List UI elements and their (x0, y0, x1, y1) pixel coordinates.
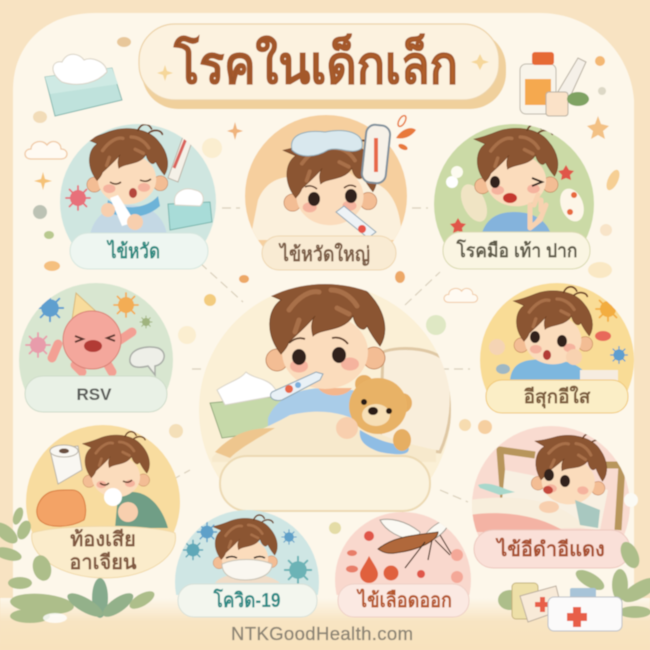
circle background (434, 124, 594, 242)
label: โควิด-19 (213, 588, 280, 612)
illustration: boy with blisters (446, 124, 588, 240)
panel: ท้องเสีย อาเจียน (26, 425, 180, 579)
circle background (60, 124, 216, 242)
label: ท้องเสีย (70, 528, 136, 551)
label pill (178, 584, 317, 617)
decorative confetti (33, 37, 622, 534)
panel: โควิด-19 (174, 510, 320, 618)
panel: RSV (18, 282, 174, 413)
illustration: boy with toilet roll (37, 432, 168, 528)
icon: tissue box top left (45, 54, 122, 116)
circle background (480, 282, 634, 391)
label pill (338, 584, 469, 617)
panel: ไข้หวัดใหญ่ (245, 114, 416, 277)
icon: fever marks (396, 114, 416, 151)
illustration: boy in bed with bear (210, 272, 451, 462)
label: ไข้เลือดออก (356, 588, 452, 612)
illustration: boy with tissue (64, 124, 213, 232)
circle background (334, 512, 472, 596)
label (69, 528, 137, 574)
icon: large thermometer (361, 124, 391, 184)
foliage: left plant (0, 506, 157, 623)
label: ไข้อีดำอีแดง (495, 537, 605, 561)
label pill (486, 380, 628, 413)
title pill (139, 24, 506, 109)
circle background (199, 292, 448, 478)
label pill (474, 530, 630, 568)
label: อาเจียน (69, 551, 137, 574)
panel: ไข้หวัด (60, 124, 216, 270)
panel: ไข้อีดำอีแดง (472, 426, 630, 569)
website footer: NTKGoodHealth.com (231, 623, 413, 644)
label: โรคมือ เท้า ปาก (456, 239, 578, 262)
illustration: virus character (26, 293, 164, 375)
circle background (18, 282, 174, 390)
icon: first aid kits (512, 583, 622, 631)
title: โรคในเด็กเล็ก (173, 34, 458, 95)
panel: โรคมือ เท้า ปาก (434, 124, 594, 284)
panel: center sick child (199, 283, 452, 512)
label pill (262, 236, 396, 270)
label pill (25, 376, 167, 412)
illustration: boy with mask (183, 515, 311, 583)
label: RSV (77, 385, 112, 404)
panel: ไข้เลือดออก (334, 512, 472, 618)
label pill (32, 526, 176, 578)
bottom ground band (0, 598, 650, 650)
foliage: right plant (498, 493, 650, 618)
illustration: boy with ice pack and thermometers (250, 131, 402, 240)
label pill (443, 232, 590, 269)
decorative cloud center right (444, 288, 478, 302)
connector lines (172, 208, 470, 502)
illustration: mosquito and blood drops (346, 519, 463, 583)
circle background (244, 114, 408, 246)
label: ไข้หวัดใหญ่ (278, 242, 370, 266)
label: ไข้หวัด (106, 239, 160, 263)
illustration: boy with chickenpox (489, 287, 627, 382)
empty label pill (220, 456, 430, 511)
icon: medicine bottle and thermometer top right (520, 52, 589, 116)
label pill (70, 233, 208, 269)
circle background (472, 426, 630, 536)
panel: อีสุกอีใส (480, 282, 634, 414)
decorative cloud left (25, 142, 67, 159)
circle background (26, 424, 180, 533)
illustration: boy in bed (470, 428, 622, 532)
label: อีสุกอีใส (524, 385, 591, 409)
circle background (174, 510, 320, 596)
